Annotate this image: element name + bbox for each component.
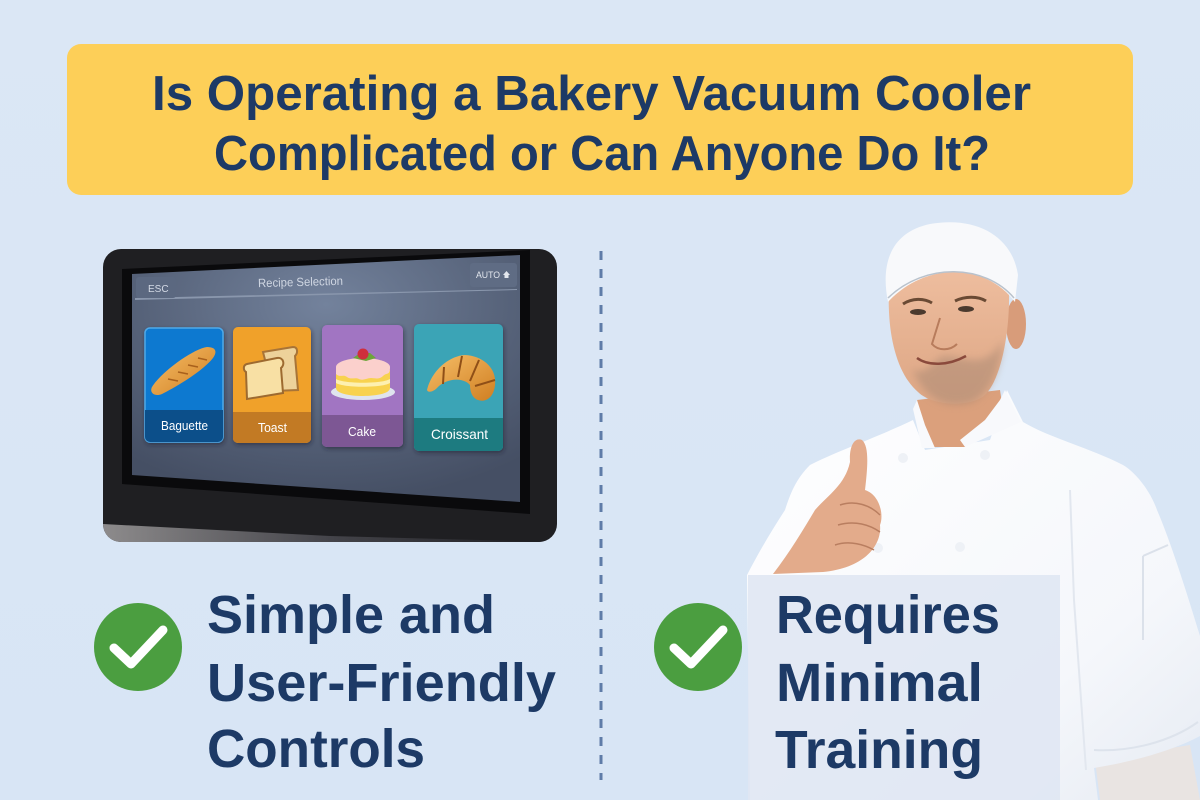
label line 1: Simple and [207,585,495,645]
divider line [600,251,602,780]
checklist item: minimal training [654,585,1000,780]
icon: green check [94,603,182,691]
ear [1006,299,1026,349]
AUTO button [476,263,517,287]
neck opening [917,390,1003,447]
thumbs-up hand [773,439,881,574]
ESC button [136,277,176,298]
label line 2: User-Friendly [207,653,556,713]
eyes and mouth [903,297,986,364]
icon: green check [654,603,742,691]
card: croissant [414,324,503,451]
card: toast [233,327,311,443]
label: Croissant: Croissant [431,426,488,442]
screen heading: Recipe Selection [258,274,343,290]
label: Baguette: Baguette [161,419,208,433]
ESC button: ESC [148,284,169,295]
title banner [67,44,1133,195]
screen display [132,255,520,502]
label line 3: Training [775,720,983,780]
card: baguette [145,328,223,442]
icon: baguette [151,347,215,395]
panel: touchscreen photo [103,249,557,549]
title line 1: Is Operating a Bakery Vacuum Cooler [152,67,1031,121]
label line 2: Minimal [776,653,983,713]
icon: croissant [427,355,495,401]
label: Cake: Cake [348,424,376,439]
coat [747,390,1200,800]
AUTO button: AUTO [476,270,500,281]
label: Toast: Toast [258,421,287,435]
label line 3: Controls [207,719,425,779]
checklist item: simple controls [94,585,556,779]
chef hat [886,222,1018,302]
forearm [1095,745,1200,800]
coat buttons [873,450,990,553]
label line 1: Requires [776,585,1000,645]
translucent text backing panel [748,575,1060,800]
face [889,271,1009,404]
card: cake [322,325,403,447]
title line 2: Complicated or Can Anyone Do It? [214,127,990,181]
icon: cake [331,348,395,400]
stubble [912,340,1003,405]
chef figure [747,222,1200,800]
collar [913,390,1021,448]
icon: toast slices [244,347,298,399]
